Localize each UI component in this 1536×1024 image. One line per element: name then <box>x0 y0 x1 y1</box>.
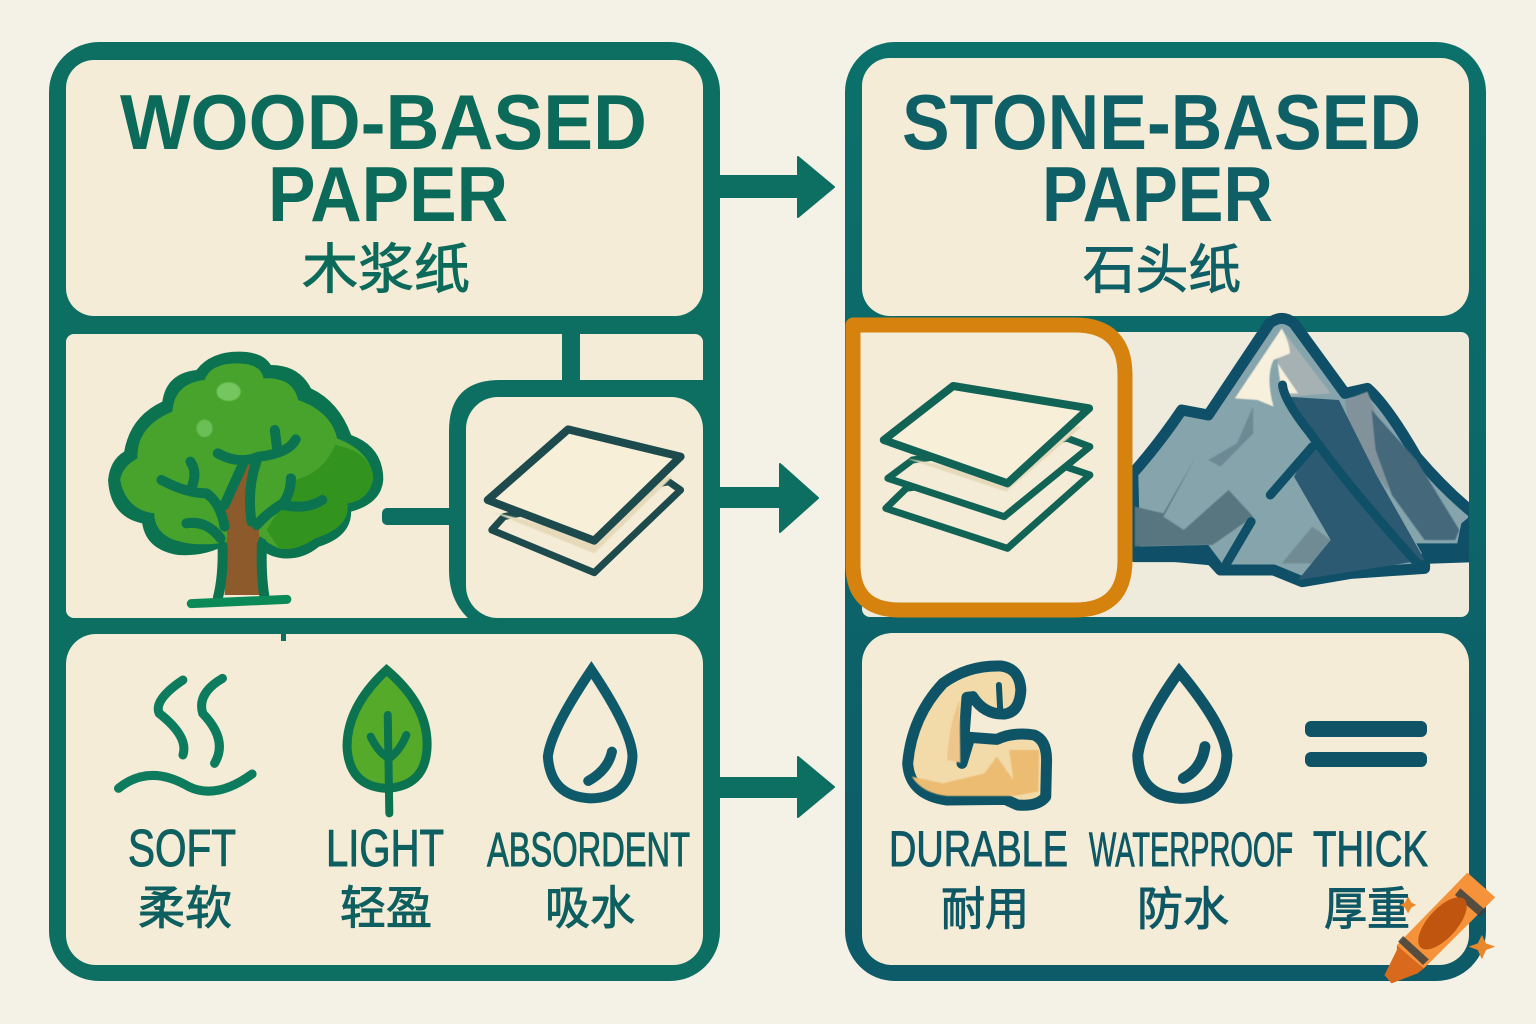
heading: stone-based paper: 石头纸 <box>1083 241 1241 300</box>
panel: wood-based paper <box>49 42 720 981</box>
label: waterproof: WATERPROOF <box>1089 824 1293 877</box>
icon: crayon <box>1384 873 1495 983</box>
label: thick: THICK <box>1313 821 1428 877</box>
label: durable: 耐用 <box>941 883 1029 935</box>
heading: stone-based paper: STONE-BASED <box>902 78 1421 166</box>
label: durable <box>889 821 1068 935</box>
panel: stone-based paper <box>845 42 1486 981</box>
icon: three paper sheets <box>884 386 1090 548</box>
icon: thick lines <box>1305 721 1427 767</box>
label: soft: SOFT <box>128 820 236 878</box>
icon: tree <box>108 352 383 604</box>
arrow: header <box>720 157 834 217</box>
label: absorbent: 吸水 <box>545 882 635 934</box>
label: absorbent: ABSORDENT <box>487 824 690 877</box>
label: waterproof <box>1089 824 1293 935</box>
label: light: LIGHT <box>326 820 444 878</box>
icon: water drop waterproof <box>1138 672 1227 798</box>
heading: wood-based paper: 木浆纸 <box>302 240 470 300</box>
icon: mountain <box>1133 318 1474 582</box>
icon: leaf <box>347 670 427 813</box>
label: waterproof: 防水 <box>1137 883 1229 935</box>
label: soft <box>128 820 236 934</box>
arrow: properties <box>720 757 834 817</box>
connector: tree to paper <box>382 508 454 525</box>
heading: wood-based paper: PAPER <box>268 150 508 238</box>
icon: two paper sheets <box>488 429 681 573</box>
heading: wood-based paper <box>120 78 647 300</box>
label: thick <box>1313 821 1428 935</box>
heading: wood-based paper: WOOD-BASED <box>120 78 647 166</box>
connector: header to paper <box>562 334 580 384</box>
label: thick: 厚重 <box>1324 883 1410 935</box>
icon: muscle arm <box>908 666 1047 805</box>
icon: water drop absorbent <box>548 670 633 798</box>
label: durable: DURABLE <box>889 821 1068 877</box>
heading: stone-based paper <box>902 78 1421 300</box>
panel: paper stack box <box>853 325 1125 610</box>
icon: soft waves <box>118 678 252 791</box>
label: light: 轻盈 <box>340 882 432 934</box>
label: absorbent <box>487 824 690 934</box>
heading: stone-based paper: PAPER <box>1042 150 1273 238</box>
panel: paper icon box <box>449 380 710 624</box>
label: light <box>326 820 444 934</box>
arrow: materials <box>720 464 818 532</box>
label: soft: 柔软 <box>138 882 232 934</box>
